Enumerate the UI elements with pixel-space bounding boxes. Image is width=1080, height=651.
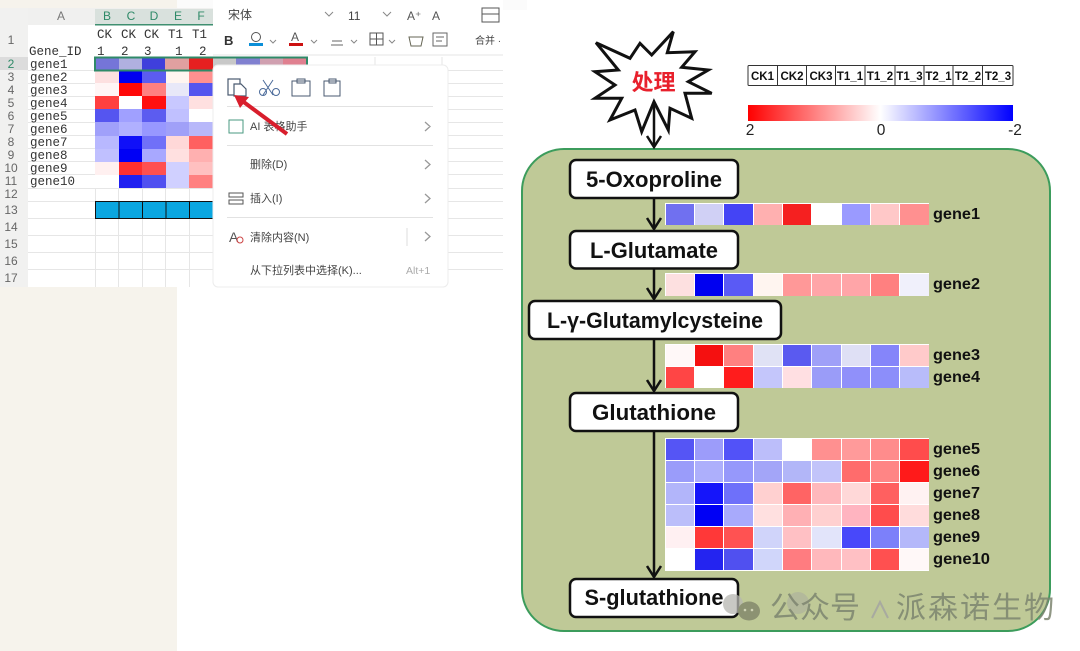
green panel bbox=[522, 149, 1050, 631]
formatting toolbar: 宋体 bbox=[228, 7, 252, 22]
column and row headers: 10 bbox=[4, 161, 18, 175]
column and row headers: 12 bbox=[4, 187, 18, 201]
node: L-y-Glutamylcysteine: L-γ-Glutamylcysteine bbox=[547, 308, 763, 333]
column and row headers: F bbox=[197, 9, 205, 23]
arrow: 5-Oxoproline to L-Glutamate bbox=[647, 198, 661, 229]
gene labels: gene3 bbox=[933, 347, 980, 364]
column and row headers: 9 bbox=[8, 148, 15, 162]
spreadsheet text: T1 bbox=[192, 28, 207, 42]
formatting toolbar bbox=[213, 0, 503, 55]
spreadsheet text: gene6 bbox=[30, 123, 68, 137]
column and row headers: 11 bbox=[5, 174, 18, 188]
heatmap gene3 and gene4 bbox=[665, 344, 929, 388]
sample header boxes: CK3 bbox=[809, 71, 833, 83]
spreadsheet text: CK bbox=[121, 28, 137, 42]
watermark: 派森诺生物 bbox=[896, 583, 1054, 627]
sample header boxes: CK2 bbox=[780, 71, 804, 83]
node: L-Glutamate: L-Glutamate bbox=[590, 238, 718, 263]
gene labels: gene1 bbox=[933, 206, 980, 223]
page background left bbox=[0, 0, 527, 651]
sample header boxes: T2_2 bbox=[955, 71, 981, 83]
node: Glutathione: Glutathione bbox=[592, 400, 716, 425]
spreadsheet text: gene9 bbox=[30, 162, 68, 176]
heatmap gene5 to gene10 bbox=[665, 438, 929, 571]
column and row headers: 14 bbox=[4, 220, 18, 234]
column and row headers: C bbox=[127, 9, 136, 23]
column and row headers: 7 bbox=[8, 122, 15, 136]
arrow: L-y-Glutamylcysteine to Glutathione bbox=[647, 339, 661, 391]
column and row headers: 5 bbox=[8, 96, 15, 110]
formatting toolbar: A⁺ bbox=[407, 9, 421, 23]
red arrow bbox=[234, 95, 287, 134]
spreadsheet text: CK bbox=[97, 28, 113, 42]
sample header boxes: T2_1 bbox=[925, 71, 952, 83]
selected row gene1 bbox=[95, 58, 307, 70]
colour scale legend bbox=[746, 105, 1022, 139]
column and row headers: 3 bbox=[8, 70, 15, 84]
context menu: 清除内容(N) bbox=[250, 230, 309, 244]
column and row headers: 2 bbox=[8, 57, 15, 71]
context menu: 插入(I) bbox=[250, 191, 282, 205]
gene labels: gene4 bbox=[933, 369, 980, 386]
context menu: 从下拉列表中选择(K)... bbox=[250, 263, 362, 277]
node: L-Glutamate bbox=[570, 231, 738, 268]
formatting toolbar: 11 bbox=[348, 9, 361, 23]
sample header boxes: T1_2 bbox=[867, 71, 893, 83]
spreadsheet text: 1 bbox=[97, 45, 105, 59]
context menu bbox=[213, 65, 448, 287]
spreadsheet text: 2 bbox=[121, 45, 129, 59]
spreadsheet text: CK bbox=[144, 28, 160, 42]
colour scale legend: 2 bbox=[746, 122, 754, 139]
spreadsheet text: 1 bbox=[175, 45, 183, 59]
context menu: A bbox=[229, 229, 239, 245]
heatmap gene1 bbox=[665, 203, 929, 225]
blue row 13 bbox=[96, 202, 213, 218]
formatting toolbar: A bbox=[432, 9, 440, 23]
sample header boxes bbox=[748, 65, 1013, 86]
watermark bbox=[723, 583, 1054, 627]
sample header boxes: T1_1 bbox=[837, 71, 864, 83]
spreadsheet text: gene10 bbox=[30, 175, 75, 189]
spreadsheet text bbox=[29, 28, 207, 189]
sample header boxes: CK1 bbox=[751, 71, 775, 83]
node: L-y-Glutamylcysteine bbox=[529, 301, 781, 339]
column and row headers: D bbox=[150, 9, 159, 23]
column and row headers: 1 bbox=[8, 33, 15, 47]
colour scale legend: 0 bbox=[877, 122, 886, 139]
spreadsheet text: gene2 bbox=[30, 71, 68, 85]
spreadsheet text: gene7 bbox=[30, 136, 68, 150]
gene labels: gene8 bbox=[933, 507, 980, 524]
column and row headers: 16 bbox=[4, 254, 18, 268]
column and row headers: B bbox=[103, 9, 111, 23]
gene labels: gene5 bbox=[933, 441, 980, 458]
context menu: AI 表格助手 bbox=[250, 119, 307, 133]
column and row headers: 17 bbox=[4, 271, 18, 285]
node: 5-Oxoproline bbox=[570, 160, 738, 198]
copy icon bbox=[228, 79, 246, 96]
gene labels: gene6 bbox=[933, 463, 980, 480]
colour scale legend: -2 bbox=[1008, 122, 1022, 139]
spreadsheet text: gene3 bbox=[30, 84, 68, 98]
starburst treatment icon: 处理 bbox=[631, 65, 676, 97]
gene labels: gene10 bbox=[933, 551, 990, 568]
spreadsheet text: T1 bbox=[168, 28, 183, 42]
formatting toolbar: B bbox=[224, 33, 233, 48]
node: S-glutathione: S-glutathione bbox=[584, 585, 724, 610]
arrow: L-Glutamate to L-y-Glutamylcysteine bbox=[647, 268, 661, 299]
spreadsheet text: gene5 bbox=[30, 110, 68, 124]
spreadsheet text: gene1 bbox=[30, 58, 68, 72]
spreadsheet text: 3 bbox=[144, 45, 152, 59]
node: S-glutathione bbox=[570, 579, 738, 617]
context menu: 删除(D) bbox=[250, 157, 287, 171]
formatting toolbar: A bbox=[291, 30, 299, 44]
gene labels: gene2 bbox=[933, 276, 980, 293]
sample header boxes: T2_3 bbox=[985, 71, 1011, 83]
spreadsheet text: Gene_ID bbox=[29, 45, 82, 59]
spreadsheet heatmap bbox=[95, 72, 212, 188]
gene labels: gene9 bbox=[933, 529, 980, 546]
column and row headers: 4 bbox=[8, 83, 15, 97]
gene labels bbox=[933, 206, 990, 568]
node: 5-Oxoproline: 5-Oxoproline bbox=[586, 167, 722, 192]
node: Glutathione bbox=[570, 393, 738, 431]
starburst treatment icon bbox=[595, 32, 712, 132]
sample header boxes: T1_3 bbox=[896, 71, 923, 83]
heatmap gene2 bbox=[665, 273, 929, 296]
watermark: 公众号 bbox=[770, 583, 860, 627]
context menu: Alt+1 bbox=[406, 265, 430, 277]
column and row headers: A bbox=[57, 9, 65, 23]
spreadsheet text: gene4 bbox=[30, 97, 68, 111]
column and row headers: 8 bbox=[8, 135, 15, 149]
arrow: treatment to panel bbox=[647, 102, 661, 147]
spreadsheet text: 2 bbox=[199, 45, 207, 59]
column and row headers bbox=[4, 9, 205, 285]
column and row headers: 15 bbox=[4, 237, 18, 251]
spreadsheet text: gene8 bbox=[30, 149, 68, 163]
arrow: Glutathione to S-glutathione bbox=[647, 431, 661, 577]
column and row headers: 13 bbox=[4, 203, 18, 217]
column and row headers: E bbox=[174, 9, 182, 23]
column and row headers: 6 bbox=[8, 109, 15, 123]
gene labels: gene7 bbox=[933, 485, 980, 502]
spreadsheet base bbox=[0, 8, 503, 287]
formatting toolbar: 合并 · bbox=[475, 34, 501, 47]
